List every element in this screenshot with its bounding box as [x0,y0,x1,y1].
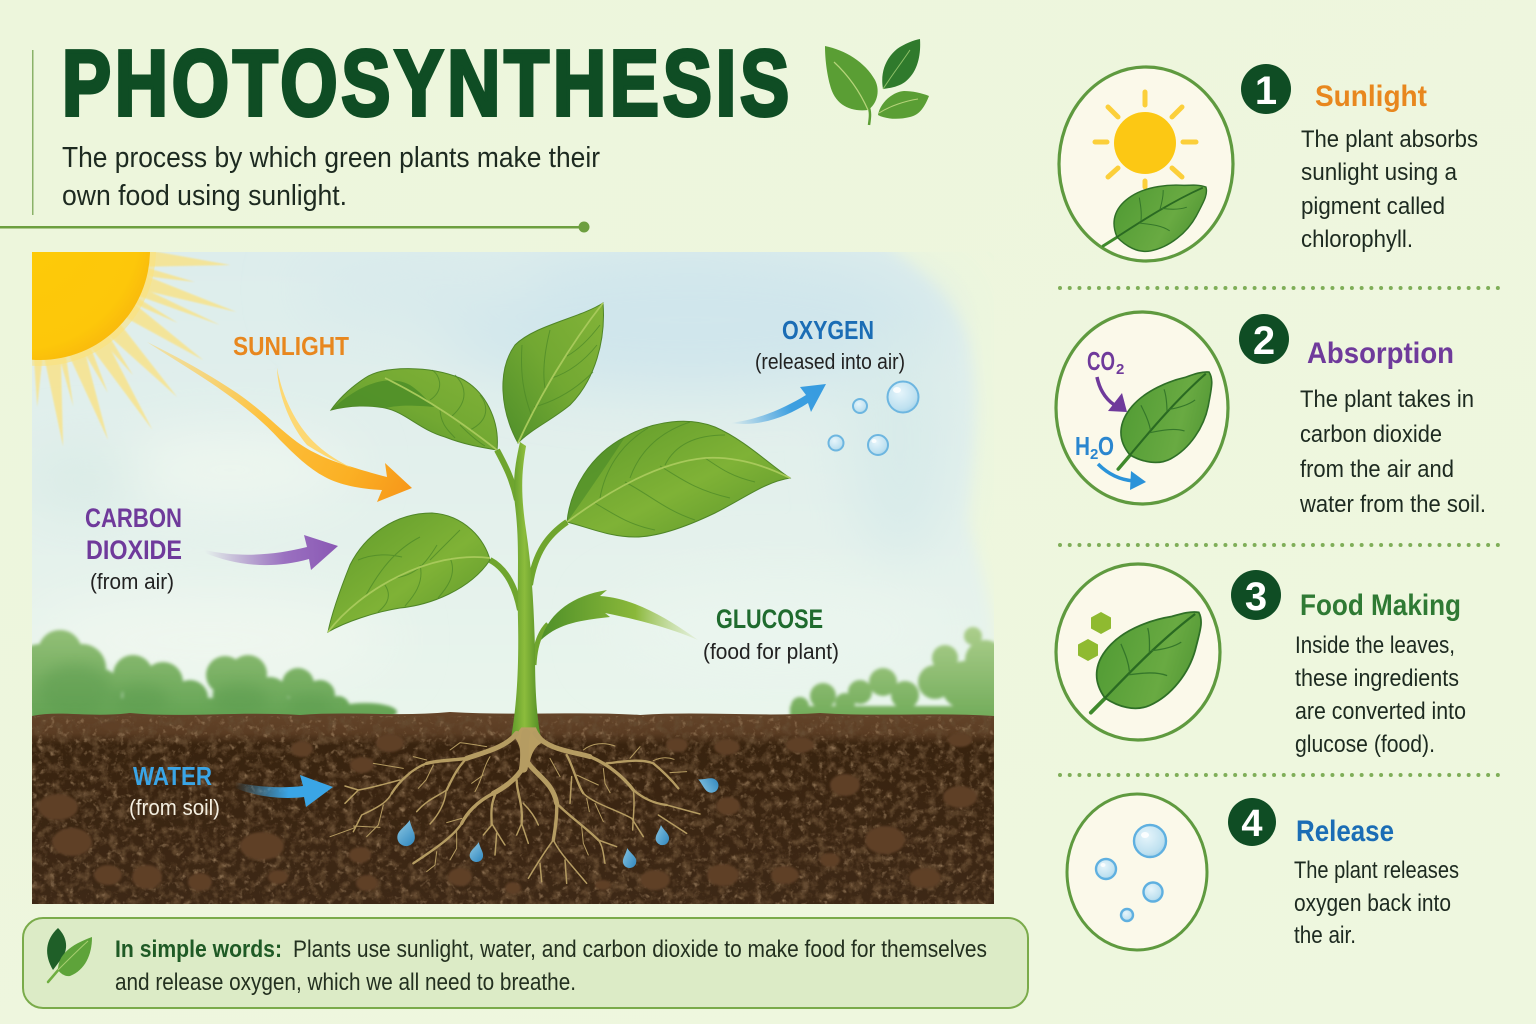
subtitle: The process by which green plants make their [62,142,600,174]
badge 2: 2 [1253,319,1275,363]
sky [32,252,994,715]
arrow: carbon dioxide [205,535,338,570]
badge 3: 3 [1245,575,1267,619]
sky tint and clouds [178,260,928,526]
body: absorption: The plant takes in [1300,386,1474,413]
label: carbon dioxide: DIOXIDE [86,535,182,565]
body: food making: glucose (food). [1295,731,1435,758]
icon: sun and leaf [1059,67,1233,272]
icon: title leaves [825,39,929,125]
label: carbon dioxide: (from air) [90,569,174,594]
callout text: In simple words: [115,936,282,963]
body: release [1294,857,1459,949]
plant [328,303,790,738]
label: glucose [703,604,839,664]
label: sunlight: SUNLIGHT [233,331,349,361]
label: water [129,761,220,820]
icon: oxygen bubbles [1067,794,1207,950]
body: sunlight: chlorophyll. [1301,226,1413,253]
arrow: sunlight [147,342,412,502]
subtitle [62,142,600,212]
icon: co2 water leaf: 2 [1116,361,1124,378]
soil clods [38,721,977,894]
label: carbon dioxide [85,503,182,594]
body: food making: these ingredients [1295,665,1459,692]
bushes right [790,627,1014,720]
panel: step 1 sunlight [1059,64,1478,272]
callout text [115,936,987,996]
leaf: top [503,303,603,443]
label: glucose: GLUCOSE [716,604,823,634]
label: oxygen: OXYGEN [782,315,874,345]
heading: sunlight: Sunlight [1315,80,1427,113]
panel: step 4 release [1067,794,1459,950]
body: sunlight: The plant absorbs [1301,126,1478,153]
leaf: right [567,421,790,537]
label: oxygen [755,315,905,374]
label: water: WATER [133,761,212,791]
body: absorption: carbon dioxide [1300,421,1442,448]
icon: glucose hexagons and leaf [1056,564,1225,741]
title: PHOTOSYNTHESIS [62,31,793,135]
body: absorption [1299,386,1486,518]
label: glucose: (food for plant) [703,639,839,664]
leaf: small glucose arrow leaf [541,590,698,640]
icon: co2 water leaf: 2 [1090,446,1098,463]
heading: food making: Food Making [1300,589,1461,622]
label: oxygen: (released into air) [755,349,905,374]
heading: release: Release [1296,815,1394,848]
callout text: and release oxygen, which we all need to breathe. [115,969,576,996]
body: sunlight [1301,126,1478,253]
icon: co2 water leaf [1056,312,1235,504]
body: release: The plant releases [1294,857,1459,884]
panel: step 3 food making [1056,564,1466,758]
bushes left [16,630,397,721]
sun rays [32,249,239,448]
body: sunlight: sunlight using a [1301,159,1458,186]
subtitle: own food using sunlight. [62,180,347,212]
body: absorption: water from the soil. [1299,491,1486,518]
oxygen bubbles [828,382,918,455]
body: release: the air. [1294,922,1356,949]
body: release: oxygen back into [1294,890,1451,917]
callout text: Plants use sunlight, water, and carbon dioxide to make food for themselves [293,936,987,963]
body: food making: Inside the leaves, [1295,632,1455,659]
badge 1: 1 [1255,69,1277,113]
soil [32,712,994,904]
icon: callout leaves [47,928,92,982]
callout: in simple words [23,918,1028,1008]
badge 2 [1239,314,1289,364]
panel: step 2 absorption [1056,312,1486,518]
body: absorption: from the air and [1300,456,1454,483]
roots [330,727,700,883]
sun [32,252,150,360]
water droplets [396,773,721,869]
badge 4: 4 [1241,803,1263,845]
body: food making: are converted into [1295,698,1466,725]
icon: co2 water leaf: O [1098,431,1114,461]
icon: co2 water leaf: H [1075,431,1090,461]
arrow: water [235,775,333,807]
leaf: lower left [328,513,490,632]
badge 1 [1241,64,1291,114]
label: water: (from soil) [129,795,220,820]
leaf: upper left [331,369,497,450]
panel: plant scene [32,252,994,904]
heading: absorption: Absorption [1307,337,1454,370]
badge 3 [1231,570,1281,620]
arrow: oxygen [730,384,826,424]
icon: co2 water leaf: CO [1087,346,1115,376]
body: sunlight: pigment called [1301,193,1445,220]
badge 4 [1228,798,1276,846]
label: carbon dioxide: CARBON [85,503,182,533]
body: food making [1295,632,1466,758]
plant stem and branches [490,442,567,738]
bushes left shading [44,664,258,703]
